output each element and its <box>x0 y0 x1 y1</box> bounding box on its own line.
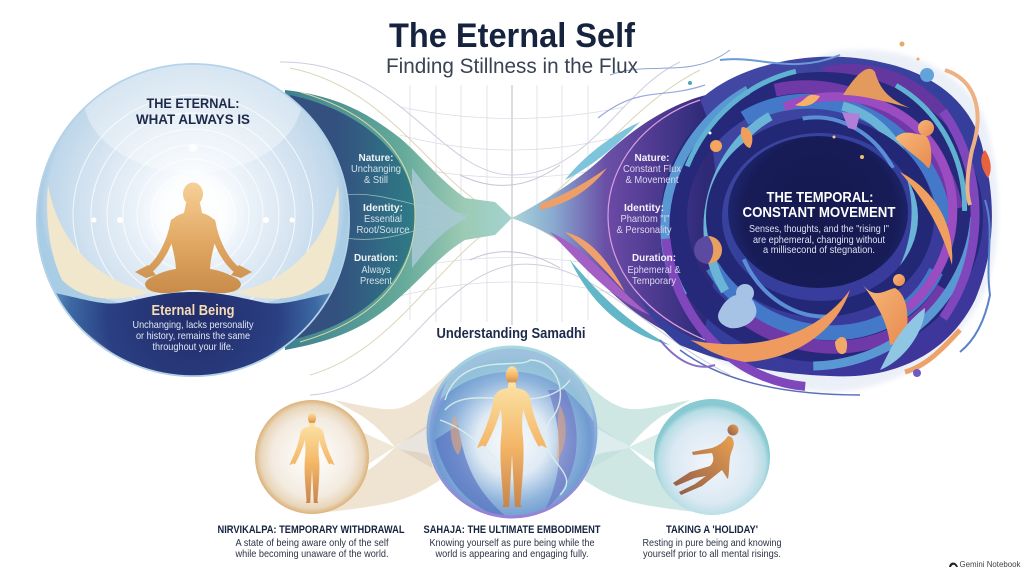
text block: temporal attributes: Identity: <box>624 202 664 214</box>
orange crescent <box>835 337 847 354</box>
upper fan <box>571 368 690 447</box>
heading: understanding samadhi: Understanding Samadhi <box>436 325 586 342</box>
caption: sahaja: world is appearing and engaging fully. <box>435 548 588 560</box>
orb <box>255 400 369 514</box>
orange swoop top <box>843 69 910 108</box>
text block: temporal attributes: Ephemeral & <box>628 264 680 276</box>
panel: bottom connector ribbons left <box>318 368 453 513</box>
outer wisps <box>598 50 990 395</box>
sphere: nirvikalpa <box>255 400 369 514</box>
pale blue leaf <box>880 308 925 370</box>
text block: temporal attributes: & Movement <box>626 174 679 186</box>
inner swirl right <box>545 390 577 510</box>
text block: eternal attributes: Unchanging <box>351 163 401 175</box>
light threads in panel <box>345 194 470 239</box>
heading: the temporal: THE TEMPORAL: <box>766 189 874 206</box>
caption: taking a holiday: TAKING A 'HOLIDAY' <box>666 524 758 536</box>
side blue shading right <box>266 234 348 304</box>
sphere: holiday <box>654 399 770 515</box>
icon: notebook mark <box>949 562 958 567</box>
pale inner band <box>412 168 468 268</box>
warm wisp right <box>556 405 566 462</box>
panel rim <box>300 92 415 342</box>
concentric rings <box>72 94 314 300</box>
side blue shading left <box>38 234 120 304</box>
panel: the eternal sphere <box>36 63 350 377</box>
text block: temporal attributes: Constant Flux <box>623 163 682 175</box>
heading: the temporal: CONSTANT MOVEMENT <box>742 204 896 221</box>
right wing <box>234 185 339 299</box>
teal top veil <box>440 345 596 425</box>
text block: eternal attributes: Present <box>360 275 392 287</box>
caption: nirvikalpa <box>218 524 405 560</box>
dark core <box>728 136 908 288</box>
lower fan <box>318 447 440 513</box>
text block: eternal attributes: Identity: <box>363 202 403 214</box>
caption: nirvikalpa: while becoming unaware of the world. <box>235 548 388 560</box>
inner swirl dark left <box>435 425 504 515</box>
lens body <box>512 92 730 352</box>
orb <box>427 346 597 518</box>
orange swoop right <box>900 172 952 265</box>
orange ball <box>710 140 722 152</box>
text block: temporal attributes: Phantom "I" <box>620 213 670 225</box>
orange person top right <box>895 120 934 168</box>
teal lower drape <box>570 260 670 345</box>
orange person lower right <box>863 274 908 345</box>
text block: temporal attributes <box>616 152 682 287</box>
floating dots <box>688 42 991 377</box>
planet <box>694 236 722 264</box>
reclining figure <box>673 424 738 495</box>
head <box>183 182 203 206</box>
orange top streak <box>540 168 607 210</box>
warm wisp left <box>451 415 461 455</box>
heading: the eternal: WHAT ALWAYS IS <box>136 111 250 127</box>
icon: meditating figure <box>135 182 252 293</box>
subtitle: Finding Stillness in the Flux <box>386 55 638 78</box>
lower fan <box>584 447 706 513</box>
upper fan <box>334 368 453 447</box>
white glow <box>158 211 228 246</box>
text block: eternal being: Eternal Being <box>152 302 234 319</box>
text block: temporal attributes: Duration: <box>632 252 676 264</box>
caption: sahaja: Knowing yourself as pure being while the <box>430 537 595 549</box>
crossing wedge right <box>395 422 432 468</box>
flowing threads <box>280 62 730 395</box>
left purple panel <box>608 100 717 340</box>
text block: eternal attributes: Always <box>362 264 390 276</box>
panel: right connector lens <box>512 92 730 352</box>
caption: nirvikalpa: NIRVIKALPA: TEMPORARY WITHDRAWAL <box>218 524 405 536</box>
planet highlight <box>708 236 722 264</box>
swirl lines <box>440 360 570 495</box>
pale outer wash <box>700 49 998 392</box>
text block: eternal attributes: Essential <box>364 213 402 225</box>
text block: temporal attributes: Nature: <box>634 152 670 164</box>
teal upper drape <box>565 122 640 180</box>
orange comma <box>741 127 752 148</box>
swirling rings <box>610 12 1024 422</box>
sphere body <box>36 63 350 377</box>
main swirl mass <box>607 57 992 376</box>
text block: eternal being: or history, remains the same <box>136 330 250 342</box>
sphere: sahaja <box>427 345 597 520</box>
orb <box>654 399 770 515</box>
orange swoop lower <box>690 290 850 362</box>
dark inner panel <box>290 95 415 340</box>
standing figure <box>290 413 334 503</box>
top pale dome <box>85 64 301 164</box>
text block: temporal description: a millisecond of stegnation. <box>763 244 875 256</box>
text block: temporal attributes: & Personality <box>616 224 672 236</box>
caption: sahaja: SAHAJA: THE ULTIMATE EMBODIMENT <box>424 524 601 536</box>
glowing sparks <box>92 144 294 223</box>
orb rim <box>428 347 596 517</box>
text block: temporal attributes: Temporary <box>632 275 677 287</box>
standing figure <box>477 366 547 507</box>
arms <box>148 222 238 271</box>
panel: the temporal vortex <box>598 12 1024 422</box>
dark hill base <box>56 292 330 376</box>
text block: temporal description: Senses, thoughts, and the "rising I" <box>749 223 889 235</box>
text block: eternal being: throughout your life. <box>152 341 234 353</box>
orange lower streak <box>565 232 625 292</box>
caption: taking a holiday <box>642 524 782 560</box>
lens body <box>285 90 512 350</box>
text block: eternal attributes: Duration: <box>354 252 398 264</box>
caption: taking a holiday: Resting in pure being and knowing <box>642 537 782 549</box>
purple panel rim <box>608 100 705 340</box>
hands <box>135 265 252 278</box>
text block: eternal attributes: & Still <box>364 174 388 186</box>
text block: temporal description: are ephemeral, changing without <box>753 234 885 246</box>
upper right purple mass <box>820 64 972 219</box>
main title: The Eternal Self <box>389 17 636 55</box>
crossing wedge left <box>592 422 629 468</box>
left wing <box>47 185 152 299</box>
caption: sahaja <box>424 524 601 560</box>
text block: eternal being: Unchanging, lacks personality <box>132 319 254 331</box>
watermark text: Gemini Notebook <box>960 560 1021 569</box>
watermark <box>949 560 1021 569</box>
caption: nirvikalpa: A state of being aware only of the self <box>236 537 389 549</box>
panel: left connector lens <box>285 90 512 350</box>
crossing wedge right <box>629 432 662 468</box>
crossing wedge left <box>362 432 395 468</box>
caption: taking a holiday: yourself prior to all mental risings. <box>643 548 781 560</box>
sphere rim <box>37 64 349 376</box>
heading: the temporal <box>742 189 896 221</box>
blue figure lower left <box>718 284 756 328</box>
torso <box>170 203 216 272</box>
text block: eternal attributes: Root/Source <box>356 224 410 236</box>
violet shard <box>842 112 860 130</box>
heading: the eternal: THE ETERNAL: <box>146 95 240 111</box>
text block: eternal being <box>132 302 254 353</box>
text block: temporal description <box>749 223 889 256</box>
purple lower streak <box>550 232 650 315</box>
purple haze <box>82 329 114 354</box>
top orange streak <box>795 95 820 106</box>
title <box>386 17 638 78</box>
text block: eternal attributes <box>351 152 410 287</box>
centre grid <box>400 85 625 325</box>
text block: eternal attributes: Nature: <box>358 152 394 164</box>
panel: bottom connector ribbons right <box>571 368 706 513</box>
heading: the eternal <box>136 95 250 127</box>
crossed legs <box>145 268 241 293</box>
